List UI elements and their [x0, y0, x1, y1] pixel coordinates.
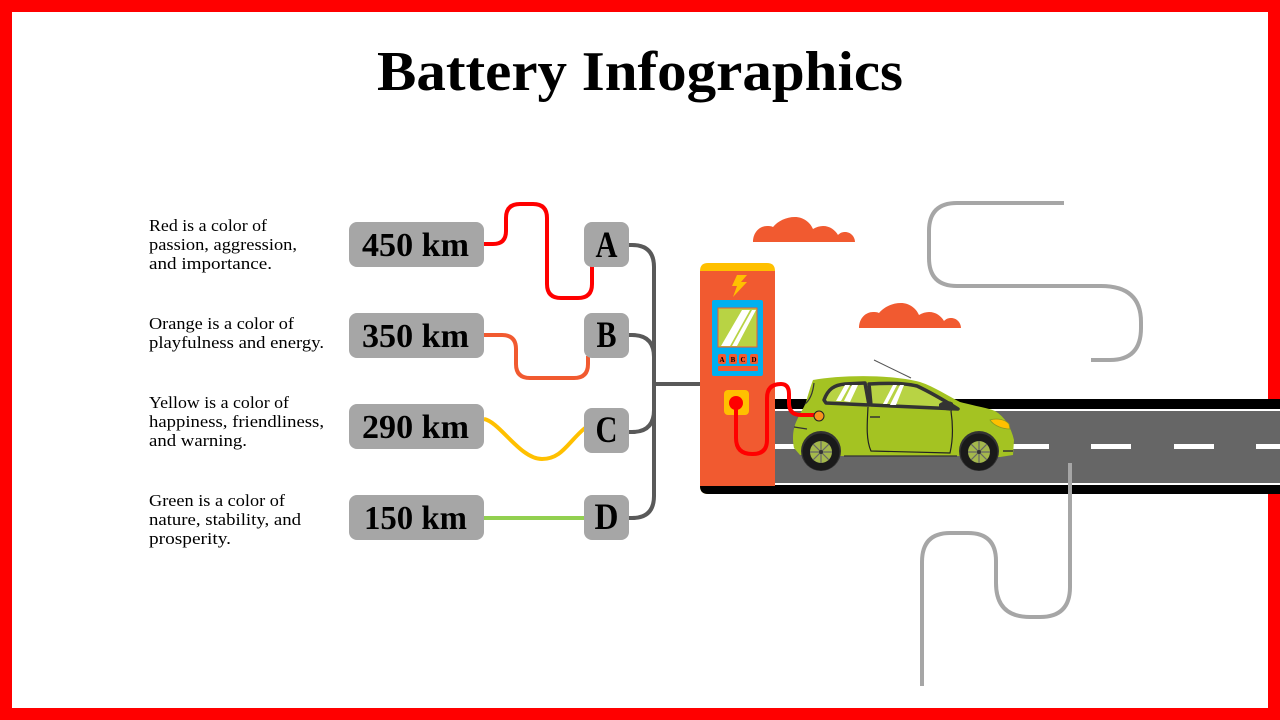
text block: orange: Orange is a color of — [149, 314, 294, 333]
text block: yellow: and warning. — [149, 431, 247, 450]
station screen — [712, 300, 763, 376]
charging station — [700, 263, 775, 494]
text block: red: and importance. — [149, 254, 272, 273]
icon: lightning bolt — [732, 275, 747, 297]
rear window — [824, 383, 869, 405]
letter box C — [584, 408, 629, 453]
distance label: 290 km: 290 km — [362, 409, 469, 446]
distance label: 350 km: 350 km — [362, 318, 469, 355]
front wheel — [959, 431, 999, 471]
text block: yellow: happiness, friendliness, — [149, 412, 324, 431]
charging cable — [729, 384, 824, 454]
distance label: 450 km: 450 km — [362, 227, 469, 264]
front window — [869, 383, 958, 409]
station body — [700, 263, 775, 494]
station screen: A — [719, 356, 725, 364]
letter box B — [584, 313, 629, 358]
letter box C: C — [596, 410, 618, 451]
green connector — [484, 516, 585, 520]
gray winding road lower — [922, 463, 1070, 686]
rear panel lines — [794, 383, 957, 456]
dark trunk connectors to charging station — [629, 245, 701, 518]
text block: green: prosperity. — [149, 529, 231, 548]
gray winding road upper — [929, 203, 1141, 360]
distance label: 450 km — [349, 222, 484, 267]
car — [793, 360, 1014, 471]
socket — [724, 390, 749, 415]
station screen: D — [751, 356, 757, 364]
window glints — [836, 385, 904, 405]
antenna — [874, 360, 911, 378]
orange connector — [484, 335, 588, 378]
text block: red — [149, 216, 297, 273]
red connector — [484, 204, 592, 298]
text block: green — [149, 491, 302, 548]
text block: red: Red is a color of — [149, 216, 267, 235]
bumper trim — [1003, 450, 1013, 452]
station screen: C — [740, 356, 746, 364]
text block: green: nature, stability, and — [149, 510, 302, 529]
text block: yellow: Yellow is a color of — [149, 393, 289, 412]
station screen: B — [731, 356, 736, 364]
road — [760, 399, 1280, 494]
text block: orange: playfulness and energy. — [149, 333, 324, 352]
letter box A: A — [596, 225, 618, 266]
letter box A — [584, 222, 629, 267]
door outline — [867, 407, 952, 453]
distance label: 290 km — [349, 404, 484, 449]
yellow connector — [484, 419, 585, 459]
rear wheel — [801, 431, 841, 471]
text block: orange — [149, 314, 324, 352]
title: Battery Infographics — [377, 41, 903, 103]
cloud lower — [859, 303, 961, 328]
text block: green: Green is a color of — [149, 491, 285, 510]
letter box D — [584, 495, 629, 540]
distance label: 150 km: 150 km — [364, 500, 467, 537]
side mirror — [939, 401, 953, 411]
distance label: 350 km — [349, 313, 484, 358]
distance label: 150 km — [349, 495, 484, 540]
door handle — [870, 416, 880, 418]
text block: yellow — [149, 393, 324, 450]
letter box D: D — [594, 497, 618, 538]
text block: red: passion, aggression, — [149, 235, 297, 254]
headlight — [990, 419, 1010, 429]
letter box B: B — [596, 315, 616, 356]
car body — [793, 376, 1014, 457]
cloud upper — [753, 217, 855, 242]
